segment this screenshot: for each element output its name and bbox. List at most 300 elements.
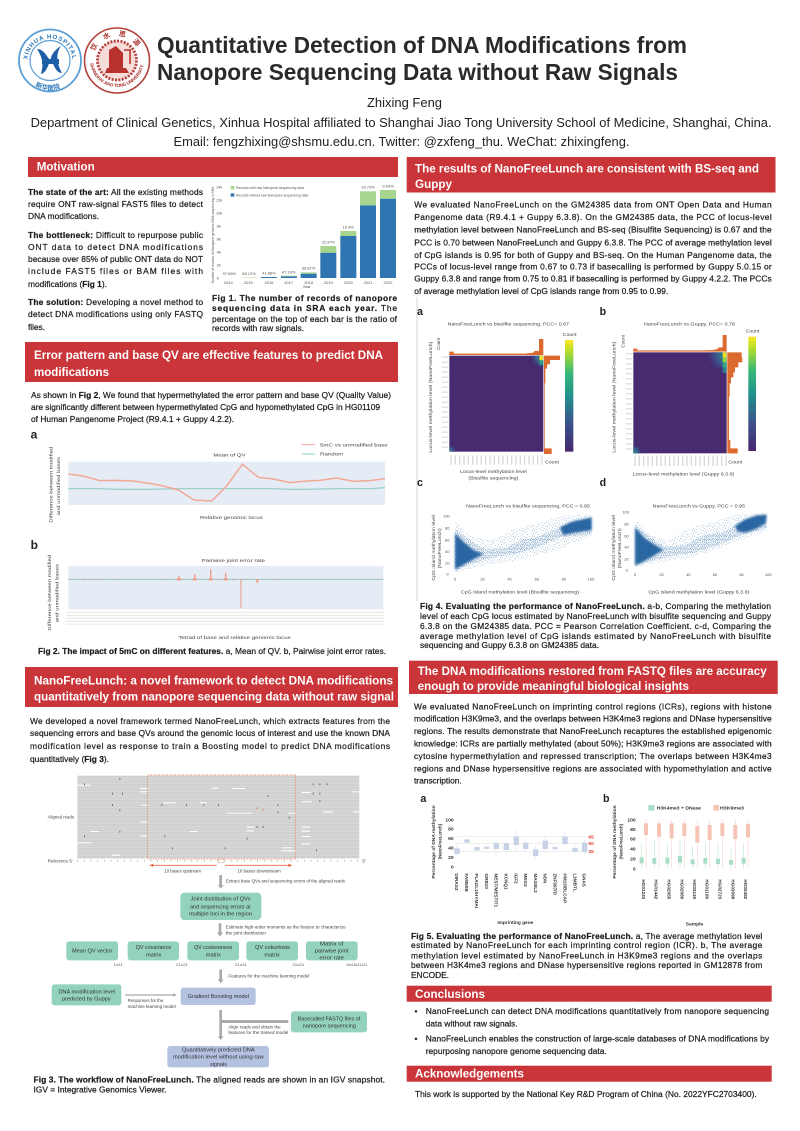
results text: Pangenome data (R9.4.1 + Guppy 6.3.8). On the GM24385 data, the PCC of locus-level [414,212,772,222]
figure 1 caption [212,293,398,333]
y axis ticks: 20 [630,856,636,862]
dense points low methylation [635,527,663,565]
error pattern text [31,390,391,424]
gene labels: NDN [542,873,547,884]
box: basecalled FASTQ [291,1011,367,1032]
legend [648,805,744,812]
dense points high methylation [560,517,592,535]
ticks [443,513,595,581]
logo: Shanghai Jiao Tong University: SHANGHAI JIAO TONG UNIVERSITY [90,63,144,87]
ticks: 20 [480,576,486,581]
reference values: 35 [588,849,594,855]
biological insights text: regions. The results demonstrate that NanoFreeLunch recaptures the established epigenomic [414,726,772,736]
colorbar: Count [746,329,760,335]
arrow: estimate moments [217,923,346,937]
error pattern text: of Human Pangenome Project (R9.4.1 + Guppy 4.2.2). [31,414,234,424]
motivation text: files. [28,322,45,332]
box: mean QV vector [66,941,123,967]
box: mean QV vector: 1x21 [114,962,123,967]
sample labels: HG01442 [654,879,659,900]
box: joint distribution: multiple loci in the region [189,912,252,918]
gene labels: DIRAS3 [454,873,459,891]
arrow: responses: machine learning model [128,1004,176,1010]
bar chart: nanopore records per year [210,183,396,289]
arrow: extract QVs: Extract base QVs and sequencing errors of the aligned reads [226,878,345,884]
error spikes [83,569,273,608]
figure 3: workflow [48,775,368,1068]
box: predicted modification level [167,1046,269,1068]
figure 2 panel b: pairwise joint error rate chart [31,538,383,641]
arrow: extract QVs [218,875,345,889]
logo: Shanghai Jiao Tong University [84,27,150,94]
panel letter b: b [31,538,38,552]
box: QV covariance matrix [128,941,189,967]
axis labels: Locus-level methylation level (NanoFreeLunch) [611,341,617,453]
IGV snapshot of aligned reads [77,776,359,858]
biological insights text: cytosine hypermethylation and repressed transcription; The overlaps between H3K4me3 [414,751,772,761]
panel: acknowledgements heading: Acknowledgements [415,1066,524,1080]
arrow: responses: Responses for the [128,998,164,1004]
ticks: 0 [446,572,449,577]
sample labels: HG02080 [679,879,684,900]
box: QV cokurtosis matrix: QV cokurtosis [255,945,290,951]
biological insights text [414,702,772,786]
panel: NanoFreeLunch heading: quantitatively from nanopore sequencing data without raw signal [34,690,394,704]
highlighted region [148,775,296,859]
figure 2 caption: Fig 2. The impact of 5mC on different features. a, Mean of QV. b, Pairwise joint error rates. [38,646,386,656]
x axis years: 2018 [304,280,314,285]
conclusions list: • [414,1033,418,1043]
arrow: estimate moments: the joint distribution [226,930,266,936]
box: pairwise joint error rate matrix: pairwise joint [315,949,349,955]
ticks: 20 [624,556,630,561]
ticks: 100 [765,572,772,577]
gene labels: GNAS [582,873,587,887]
figure 4 caption: Fig 4. Evaluating the performance of NanoFreeLunch. a-b, Comparing the methylation [420,601,771,611]
orange boxes [644,823,750,843]
heatmap title: NanoFreeLunch vs Guppy, PCC= 0.78 [644,322,735,328]
axis labels: Count [728,460,743,466]
axis labels: (NanoFreeLunch) [437,528,443,568]
medium density points [455,517,592,572]
ticks: 80 [445,526,450,531]
panel letter c: c [417,477,423,489]
panel letter a: a [31,428,38,442]
axis labels: Locus-level methylation level (Guppy 6.3.8) [633,472,735,478]
y axis ticks [445,817,454,870]
y axis ticks: 10k [216,210,222,215]
y axis label: (NanoFreeLunch) [619,824,625,859]
y axis label [431,805,444,879]
ticks: 40 [624,545,630,550]
x axis years: 2020 [344,280,354,285]
legend: H3K9me3 [720,806,744,812]
box: Guppy prediction: DNA modification level [58,989,115,995]
results text: methylation level between NanoFreeLunch and BS-seq (Bisulfite Sequencing) is 0.67 and the [414,224,772,234]
sample labels: HG02723 [717,879,722,900]
box: predicted modification level: Quantitatively predicted DNA [182,1047,255,1053]
panel letter d: d [600,477,606,489]
heatmap cells [633,352,727,454]
sample labels: HG01243 [641,879,646,900]
arrow: features [218,969,309,983]
panel: biological insights heading: enough to provide meaningful biological insights [418,679,689,693]
box: QV cokurtosis matrix [246,941,305,967]
box: QV cokurtosis matrix: 21x21 [292,962,305,967]
boxes [454,837,587,856]
x axis years: Year [303,284,311,289]
motivation text: because over 85% of public ONT data do NOT [28,254,203,264]
figure 5 caption: estimated by NanoFreeLunch for each imprinting control region (ICR). b, The average [411,940,763,950]
axis labels: CpG island methylation level [431,515,437,581]
heatmap title: NanoFreeLunch vs bisulfite sequencing, PCC= 0.67 [448,322,569,328]
axis labels: (NanoFreeLunch) [617,528,623,568]
y axis label: and unmodified bases [56,456,62,515]
ticks: 100 [588,576,595,581]
dense points high methylation [735,515,767,533]
figure 1 caption: Fig 1. The number of records of nanopore [212,293,397,303]
author and affiliation [31,95,772,149]
box: gradient boosting model: Gradient Boosting model [188,994,249,1000]
axis labels: CpG island methylation level [611,515,617,581]
axis labels: Locus-level methylation level [460,469,527,475]
arrow: responses [125,993,177,1010]
logo: Shanghai Jiao Tong University: 饮水思源 [90,30,142,50]
NanoFreeLunch text [30,716,390,764]
legend: 5mC vs unmodified base [320,442,388,448]
bar percentages: 47.19% [282,270,296,275]
results text: We evaluated NanoFreeLunch on the GM24385 data from ONT Open Data and Human [414,200,772,210]
figure 4 caption: average methylation level of CpG islands estimated by NanoFreeLunch with bisulfite [420,631,771,641]
panel: results heading [407,157,776,192]
box: Guppy prediction [52,984,121,1005]
conclusions list: repurposing nanopore genome sequencing data. [426,1046,607,1056]
y axis ticks: 8k [217,223,221,228]
error pattern text: As shown in Fig 2, We found that hypermethylated the error pattern and base QV (Quality Value) [31,390,391,400]
box: basecalled FASTQ: Basecalled FASTQ files of [298,1016,361,1022]
box: predicted modification level: modification level without using raw [173,1055,264,1061]
legend: Random [320,452,343,458]
bar percentages: 9.64% [382,183,394,188]
panel letter a: a [420,793,426,805]
bar percentages: 10.9% [343,224,354,229]
figure 4 caption: sequencing and Guppy 6.3.8 on GM24385 data. [420,640,599,650]
baseline [68,578,383,581]
ticks: 0 [454,576,457,581]
legend: Records without raw Nanopore sequencing data [236,192,309,197]
ticks: 80 [739,572,745,577]
legend: H3K4me3 + DNase [657,806,701,812]
figure 5 caption: Fig 5. Evaluating the performance of NanoFreeLunch. a, The average methylation level [411,931,762,941]
figure 5 panel a: imprinting box plot [420,793,594,925]
arrow: trained model [218,1010,288,1040]
5mC line [68,464,385,501]
figure 1 caption: sequencing data in SRA each year. The [212,303,397,313]
figure 4 caption: level of each CpG locus estimated by NanoFreeLunch with bisulfite sequencing and Guppy [420,611,772,621]
whiskers [646,819,748,868]
axis labels: (Bisulfite sequencing) [468,475,519,481]
arrow: trained model: Align reads and obtain the [228,1024,281,1030]
upstream arrow: 10 bases upstream [164,868,201,874]
axis labels: Count [620,334,626,348]
results text [414,200,772,296]
ticks: 100 [622,509,630,514]
motivation text [28,187,204,332]
panel: error pattern heading: modifications [34,365,109,379]
chart title: Mean of QV [213,453,246,459]
motivation text: DNA modifications. [28,211,99,221]
ticks: 0 [626,568,629,573]
sample labels: HG03098 [730,879,735,900]
biological insights text: regions and DNase hypersensitive regions are associated with hypomethylation and active [414,763,772,773]
downstream arrow [225,864,292,874]
read labels: Aligned reads [48,815,74,821]
motivation text: The state of the art: All the existing methods [28,187,203,197]
axis labels [611,334,743,478]
figure 1 caption: percentage on the top of each bar is the ratio of [212,314,398,324]
axis labels: CpG island methylation level (Bisulfite sequencing) [461,589,579,595]
logo: Xinhua Hospital: XINHUA HOSPITAL [23,34,76,60]
conclusions list: NanoFreeLunch enables the construction of large-scale databases of DNA modifications by [426,1033,770,1043]
y axis ticks: 100 [627,817,636,823]
box: joint distribution: Joint distribution of QVs [191,897,251,903]
medium density points [635,515,767,567]
plot area [68,566,383,609]
box: pairwise joint error rate matrix: 16x16x21x21 [346,962,368,967]
figure 4 panel c: scatter plot [417,477,595,595]
panel letter b: b [603,793,610,805]
y axis ticks: 12k [216,197,222,202]
gene labels: FAM50B [464,873,469,892]
right histogram [544,356,560,454]
sparse points [635,513,767,567]
figure 4 panel d: scatter plot [600,477,772,595]
results text: PCC is 0.70 between NanoFreeLunch and Guppy 6.3.8. The PCC of average methylation level [414,237,772,247]
bar percentages [223,183,394,276]
gene labels: L3MBTL [572,873,577,892]
panel: conclusions heading: Conclusions [415,987,485,1001]
y axis ticks: 40 [448,845,454,851]
ticks: 80 [562,576,567,581]
ticks [622,509,772,577]
panel: error pattern heading [25,342,398,382]
x axis years: 2015 [244,280,254,285]
arrow: features: Features for the machine learning model [228,974,309,980]
y axis ticks: 40 [630,846,636,852]
panel: biological insights heading: The DNA modifications restored from FASTQ files are accuracy [418,664,767,678]
gene labels: MEG3 [523,873,528,887]
reference sequence [77,858,359,863]
motivation text: The bottleneck: Difficult to repurpose public [28,230,203,240]
logo: Xinhua Hospital [18,28,82,92]
motivation text: modifications (Fig 1). [28,279,107,289]
box: QV coskewness matrix: 21x21 [235,962,248,967]
axis labels: Locus-level methylation level (NanoFreeLunch) [428,341,434,453]
results text: of average methylation level of CpG islands range from 0.95 to 0.99. [414,286,668,296]
x axis label: Sample [686,922,704,927]
panel: motivation heading: Motivation [37,160,95,174]
conclusions list [414,1006,770,1056]
y axis label: Difference between modified [48,446,54,523]
figure 1 caption: records with raw signals. [212,323,304,333]
biological insights text: modification H3K9me3, and the overlaps between H3K4me3 regions and DNase hypersensitive [414,714,772,724]
arrow: trained model: features for the trained model [228,1030,288,1036]
legend [302,442,388,458]
y axis ticks: 0 [451,864,454,870]
figure 3 caption [34,1074,385,1094]
reference values [588,834,594,855]
bar percentages: 22.97% [322,239,336,244]
author and affiliation: Department of Clinical Genetics, Xinhua Hospital affiliated to Shanghai Jiao Tong University School of Medicine, Shanghai, China. [31,115,772,130]
ticks: 20 [445,561,450,566]
y axis ticks: 2k [217,262,221,267]
whiskers [457,830,584,858]
ticks: 60 [713,572,718,577]
axis labels [428,337,560,481]
box: pairwise joint error rate matrix [306,941,368,967]
x axis years: 2017 [284,280,294,285]
scatter title: NanoFreeLunch vs Guppy, PCC = 0.95 [653,503,745,509]
box: QV covariance matrix: 21x21 [176,962,189,967]
plot area [68,462,385,505]
heatmap cells [449,356,544,452]
y axis label: Difference between modified [47,554,53,631]
tick labels [445,357,543,460]
sample labels: HG03119 [692,879,697,899]
y axis ticks: 100 [445,817,454,823]
y axis ticks: 20 [448,855,454,861]
y axis label [612,805,625,879]
figure 4 caption [420,601,772,650]
panel: acknowledgements heading [407,1066,772,1082]
panel letter a: a [417,306,423,318]
figure 3 caption: IGV = Integrative Genomics Viewer. [34,1084,166,1094]
box: pairwise joint error rate matrix: error rate [319,956,344,962]
gene labels: GRB10 [484,873,489,889]
x axis years: 2014 [224,280,234,285]
panel: NanoFreeLunch heading [25,667,398,707]
colorbar: Count [563,332,577,338]
logo: Xinhua Hospital: 新华医院 [36,82,60,90]
box: joint distribution: and sequencing errors at [190,904,251,910]
title: Quantitative Detection of DNA Modifications from [157,32,687,58]
box: QV covariance matrix: QV covariance [136,945,171,951]
box: joint distribution [180,893,261,920]
figure 4 panel a: heatmap [417,306,577,481]
gene labels: ZNF597/D [552,873,557,895]
y axis label [48,446,62,523]
acknowledgements text: This work is supported by the National Key R&D Program of China (No. 2022YFC2703400). [415,1089,757,1099]
biological insights text: transcription. [414,776,462,786]
figure 5 caption [411,931,763,980]
box: gradient boosting model [181,988,256,1005]
NanoFreeLunch text: We developed a novel framework termed NanoFreeLunch, which extracts features from the [30,716,390,726]
x axis label: Imprinting gene [497,920,534,925]
gene labels: HM13/BLCAP [562,873,567,903]
box: Guppy prediction: predicted by Guppy [62,997,111,1003]
chart title: Pairwise joint error rate [202,558,265,564]
axis labels: CpG island methylation level (Guppy 6.3.8) [648,589,750,595]
top histogram [633,335,727,352]
legend: Records with raw Nanopore sequencing data [236,185,305,190]
panel: motivation heading [28,157,398,177]
figure 4 panel b: heatmap [600,306,760,478]
ticks: 40 [686,572,691,577]
y axis ticks [216,184,222,280]
gene labels: KCNQ1 [503,873,508,890]
conclusions list: • [414,1006,418,1016]
y axis ticks: 4k [217,249,221,254]
right histogram [727,352,742,453]
y axis label: Number of records of Nanopore genomic DNA sequencing in SRA [210,186,215,283]
axis labels: Count [436,337,442,350]
biological insights text: We evaluated NanoFreeLunch on imprinting control regions (ICRs), regions with histone [414,702,772,712]
tick labels [629,353,727,461]
axis labels [611,515,750,595]
x axis years: 2019 [324,280,334,285]
gene labels [454,873,587,908]
axis labels [431,515,579,595]
bar percentages: 38.87% [302,266,316,271]
y axis ticks: 60 [630,837,636,843]
reference lines [455,837,587,852]
box: basecalled FASTQ: nanopore sequencing [303,1024,356,1030]
results text: Guppy 6.3.8 and range from 0.75 to 0.81 if basecalling is performed by Guppy 4.2.2. The PCCs [414,274,772,284]
y axis ticks: 14k [216,184,222,189]
motivation text: include FAST5 files or BAM files with [28,266,203,276]
figure 2 panel a: mean of QV line chart [31,428,388,523]
y axis ticks: 80 [630,827,636,833]
gene labels: MEST/MESTIT1 [493,873,498,908]
figure 3 caption: Fig 3. The workflow of NanoFreeLunch. The aligned reads are shown in an IGV snapshot. [34,1074,385,1084]
bar percentages: 41.88% [262,270,276,275]
ticks: 60 [624,533,630,538]
panel: results heading: The results of NanoFreeLunch are consistent with BS-seq and [415,162,759,176]
tick labels [67,612,383,624]
sparse points [455,514,592,572]
ticks: 40 [507,576,513,581]
bar percentages: 58.12% [242,271,256,276]
author and affiliation: Zhixing Feng [367,95,442,110]
y axis ticks [627,817,636,872]
box: pairwise joint error rate matrix: Matrix of [320,941,344,947]
arrow: estimate moments: Estimate high-order moments as the feature to characterize [226,925,346,931]
NanoFreeLunch text: quantitatively (Fig 3). [30,754,109,764]
figure 4 divider [416,297,418,601]
target locus [218,859,224,863]
bar percentages: 97.55% [223,271,237,276]
x axis years: 2016 [265,280,274,285]
green boxes [640,856,746,865]
y axis label: Percentage of DNA methylation [431,805,437,879]
x axis label: Tetrad of base and relative genomic locus [178,635,291,641]
ticks: 60 [445,537,450,542]
y axis label: (NanoFreeLunch) [438,824,444,859]
downstream arrow: 10 bases downstream [237,868,281,874]
panel letter b: b [600,306,607,318]
biological insights text: knowledge: ICRs are partially methylated (about 50%); H3K9me3 regions are associated with [414,738,772,748]
NanoFreeLunch text: modification level as response to train a Boosting model to predict DNA modifications [30,741,390,751]
error pattern text: are significantly different between hypermethylated CpG and hypomethylated CpG in HG01109 [31,402,380,412]
panel: results heading: Guppy [415,177,452,191]
title: Nanopore Sequencing Data without Raw Signals [157,59,678,85]
conclusions list: NanoFreeLunch can detect DNA modifications quantitatively from nanopore sequencing [426,1006,769,1016]
colorbar [746,329,760,451]
box: mean QV vector: Mean QV vector [72,948,113,954]
scatter title: NanoFreeLunch vs bisulfite sequencing, PCC = 0.95 [466,503,590,509]
figure 5 caption: ENCODE. [411,970,449,980]
figure 5 caption: methylation level estimated by NanoFreeLunch in H3K9me3 regions and the overlaps [411,951,762,961]
